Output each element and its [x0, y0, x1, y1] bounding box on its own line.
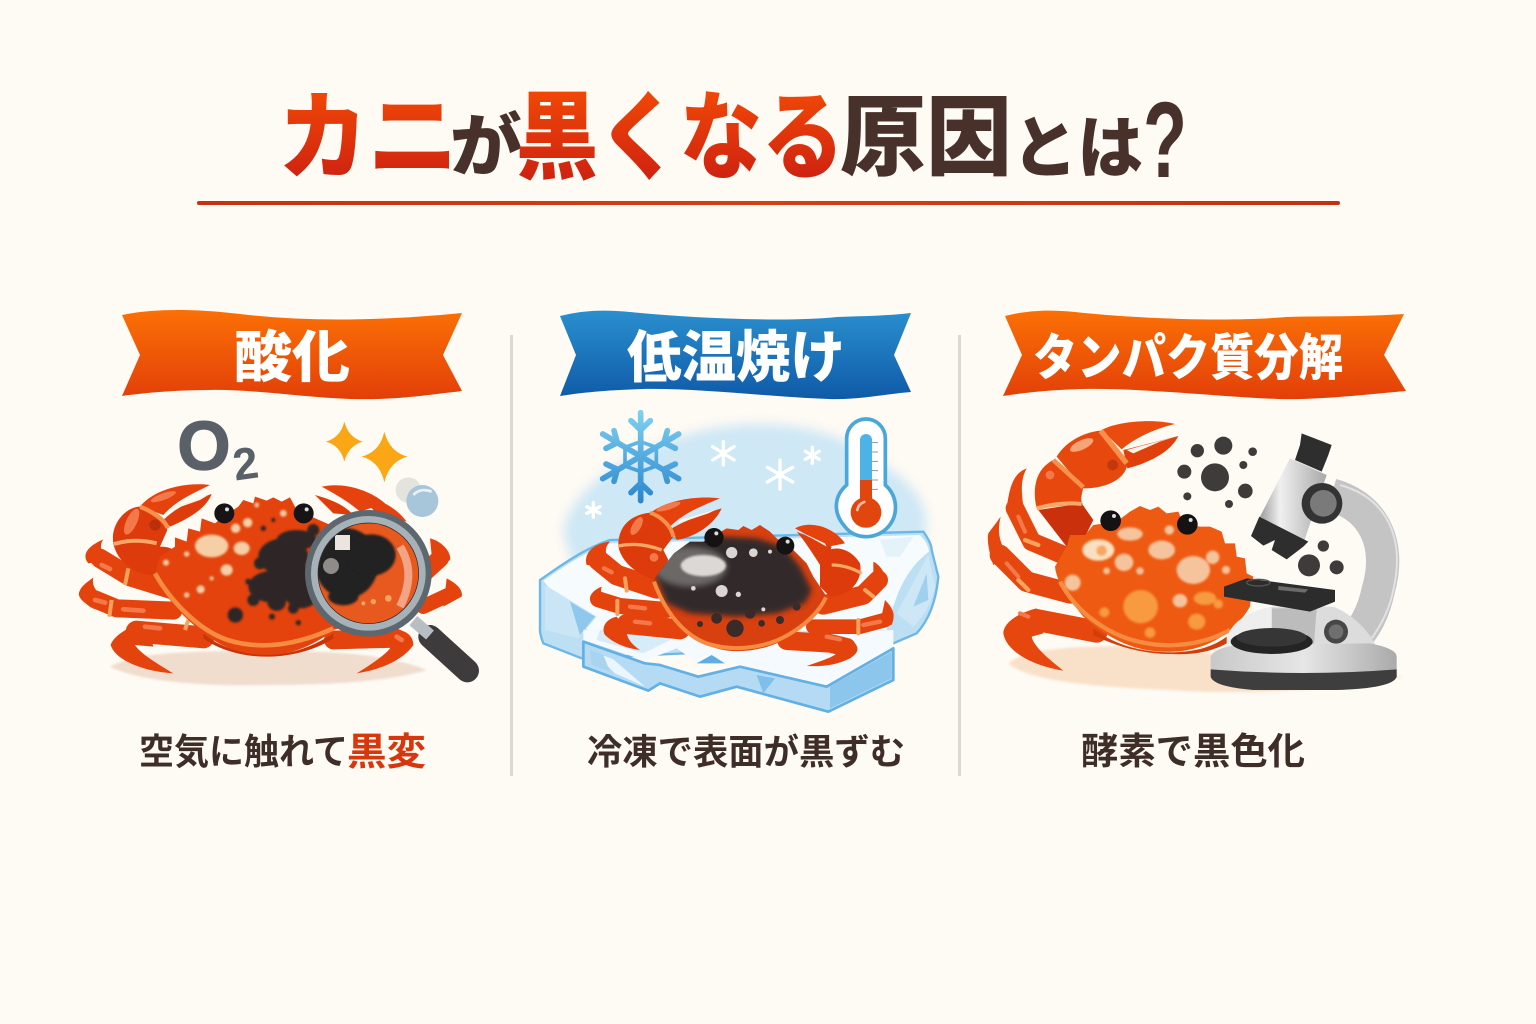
illustration: crab on ice	[540, 413, 938, 712]
illustration: oxidised crab with magnifier	[79, 408, 467, 685]
banner: 低温焼け: 低温焼け	[627, 326, 845, 389]
crab body	[653, 525, 827, 651]
light spots	[163, 503, 287, 598]
banner: 低温焼け	[560, 311, 911, 399]
caption: oxidation: 黒変	[347, 732, 426, 774]
title: 原因	[840, 88, 1012, 187]
icon: O2: O	[177, 408, 230, 484]
caption: freezer burn: 冷凍で表面が黒ずむ	[587, 732, 905, 772]
title: ?	[1143, 79, 1187, 200]
ice block back	[540, 532, 938, 658]
banner: タンパク質分解	[1003, 311, 1406, 399]
magnifying glass	[305, 510, 467, 671]
snow mist	[563, 424, 926, 567]
icon: thermometer	[836, 419, 895, 537]
crab legs	[988, 468, 1097, 671]
caption: protein breakdown: 酵素で黒色化	[1081, 731, 1305, 772]
banner: 酸化: 酸化	[234, 326, 350, 389]
microscope	[1211, 433, 1397, 690]
banner: タンパク質分解: タンパク質分解	[1033, 330, 1343, 386]
eyes	[214, 503, 314, 523]
divider	[510, 335, 513, 776]
crab legs	[586, 542, 894, 666]
crab claws	[618, 497, 862, 597]
illustration: crab with microscope	[988, 421, 1403, 692]
icon: sparkles	[326, 422, 407, 482]
eyes	[704, 528, 794, 555]
crab body	[1055, 506, 1253, 652]
panel: protein breakdown	[988, 311, 1406, 772]
title: カニ	[278, 85, 458, 192]
ground shadow	[110, 651, 427, 685]
crab claws	[113, 484, 407, 575]
title: 黒くなる	[516, 85, 844, 192]
big claw	[1035, 421, 1178, 547]
crab body	[155, 497, 407, 656]
caption: oxidation: 空気に触れて	[139, 731, 348, 772]
title: とは	[1012, 111, 1143, 187]
ground shadow	[1008, 646, 1403, 692]
light spots	[1065, 525, 1230, 607]
banner: 酸化	[122, 310, 462, 399]
ice block front	[583, 630, 893, 712]
black spots	[228, 518, 322, 625]
eyes	[1100, 510, 1198, 535]
divider	[958, 335, 961, 776]
title	[278, 79, 1187, 200]
dark burn patch	[653, 537, 812, 637]
icon: O2	[177, 408, 261, 491]
panel: oxidation	[79, 310, 467, 774]
dark particles	[1177, 437, 1344, 576]
icon: snowflake	[603, 413, 679, 501]
icon: O2: 2	[229, 437, 261, 491]
icon: bubbles	[396, 477, 438, 517]
panel: freezer burn	[540, 311, 938, 772]
title underline	[197, 201, 1340, 205]
crab legs	[79, 538, 462, 673]
small snowflakes	[587, 442, 819, 517]
title: が	[450, 109, 522, 185]
